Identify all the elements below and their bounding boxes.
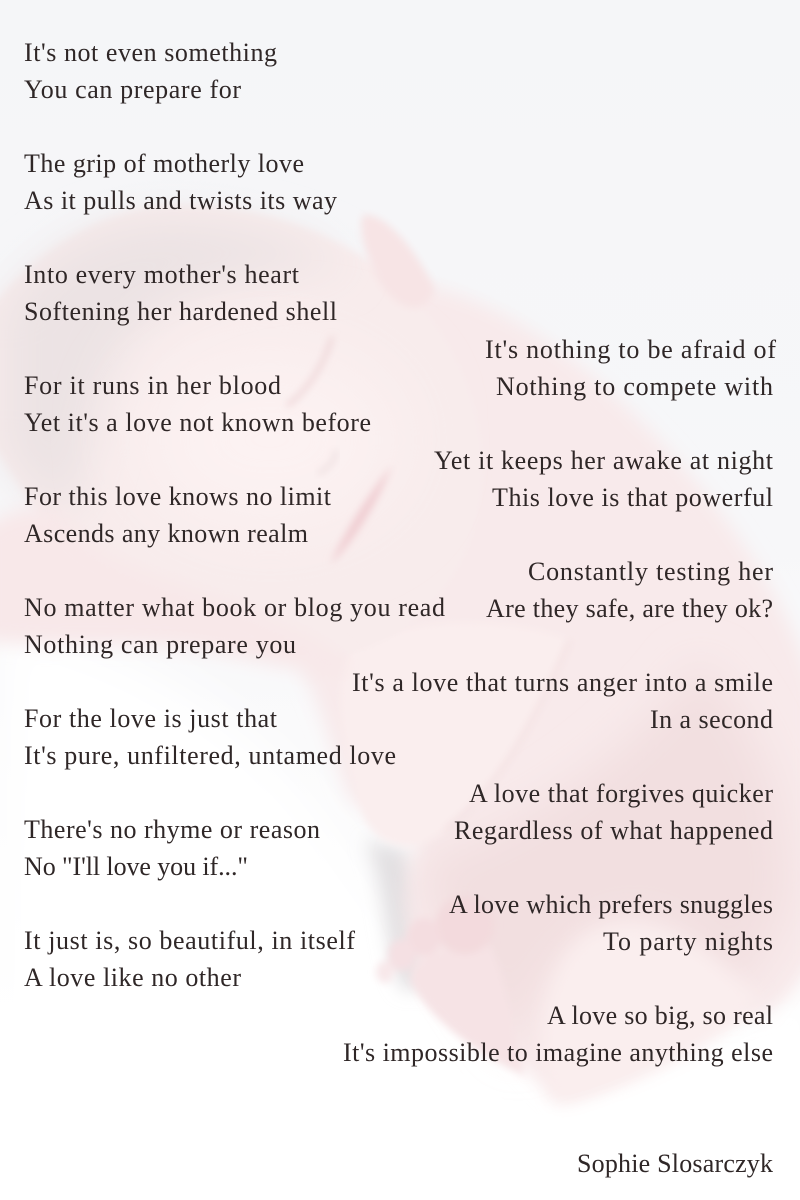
- body shade: [420, 660, 790, 1060]
- poem: left column: The grip of motherly love: [24, 149, 304, 178]
- poem: right column: To party nights: [603, 927, 773, 956]
- blanket shadow: [365, 840, 433, 991]
- poem: right column: A love which prefers snuggles: [449, 890, 773, 919]
- poem: left column: A love like no other: [24, 963, 241, 992]
- poem: left column: Softening her hardened shell: [24, 297, 337, 326]
- poem: left column: No matter what book or blog you read: [24, 593, 445, 622]
- poem: left column: Nothing can prepare you: [24, 630, 296, 659]
- arm: [341, 622, 570, 846]
- poem: left column: Into every mother's heart: [24, 260, 300, 289]
- poem: right column: Yet it keeps her awake at night: [434, 446, 774, 475]
- poem: left column: It's not even something: [24, 38, 277, 67]
- poem: left column: For the love is just that: [24, 704, 278, 733]
- eye lash line: [288, 338, 332, 405]
- cheek glow: [140, 350, 400, 530]
- lips: [330, 465, 392, 565]
- poem: left column: There's no rhyme or reason: [24, 815, 320, 844]
- poem: left column: It just is, so beautiful, in itself: [24, 926, 355, 955]
- poem: right column: Constantly testing her: [528, 557, 773, 586]
- baby body: [300, 280, 800, 1105]
- poem: left column: For it runs in her blood: [24, 371, 281, 400]
- poem: right column: Nothing to compete with: [496, 372, 773, 401]
- poem: right column: Are they safe, are they ok?: [486, 594, 773, 623]
- poem: right column: A love so big, so real: [547, 1001, 773, 1030]
- author signature: Sophie Slosarczyk: [577, 1149, 773, 1178]
- white blanket: [0, 620, 800, 1200]
- poem: left column: [24, 38, 445, 992]
- poem: right column: It's impossible to imagine anything else: [343, 1038, 773, 1067]
- arm crease: [445, 640, 570, 830]
- white fade over lower edge: [0, 1000, 800, 1170]
- poem: left column: For this love knows no limit: [24, 482, 332, 511]
- poem: right column: In a second: [650, 705, 773, 734]
- poem: left column: Yet it's a love not known before: [24, 408, 371, 437]
- foot: [376, 896, 525, 1075]
- head: [0, 205, 482, 655]
- poem: left column: Ascends any known realm: [24, 519, 308, 548]
- hand: [0, 508, 350, 673]
- poem: left column: You can prepare for: [24, 75, 241, 104]
- poem: right column: This love is that powerful: [492, 483, 773, 512]
- poem: right column: It's nothing to be afraid of: [485, 335, 776, 364]
- poem: right column: Regardless of what happened: [454, 816, 773, 845]
- poem: right column: [343, 335, 776, 1067]
- poem: left column: No "I'll love you if...": [24, 852, 248, 881]
- ear: [361, 215, 435, 308]
- hair shade: [0, 218, 350, 520]
- poem: left column: As it pulls and twists its way: [24, 186, 337, 215]
- thigh highlight: [543, 924, 760, 1105]
- poem: left column: It's pure, unfiltered, untamed love: [24, 741, 396, 770]
- nose: [318, 450, 336, 474]
- poem: right column: A love that forgives quicker: [469, 779, 773, 808]
- poem: right column: It's a love that turns anger into a smile: [352, 668, 773, 697]
